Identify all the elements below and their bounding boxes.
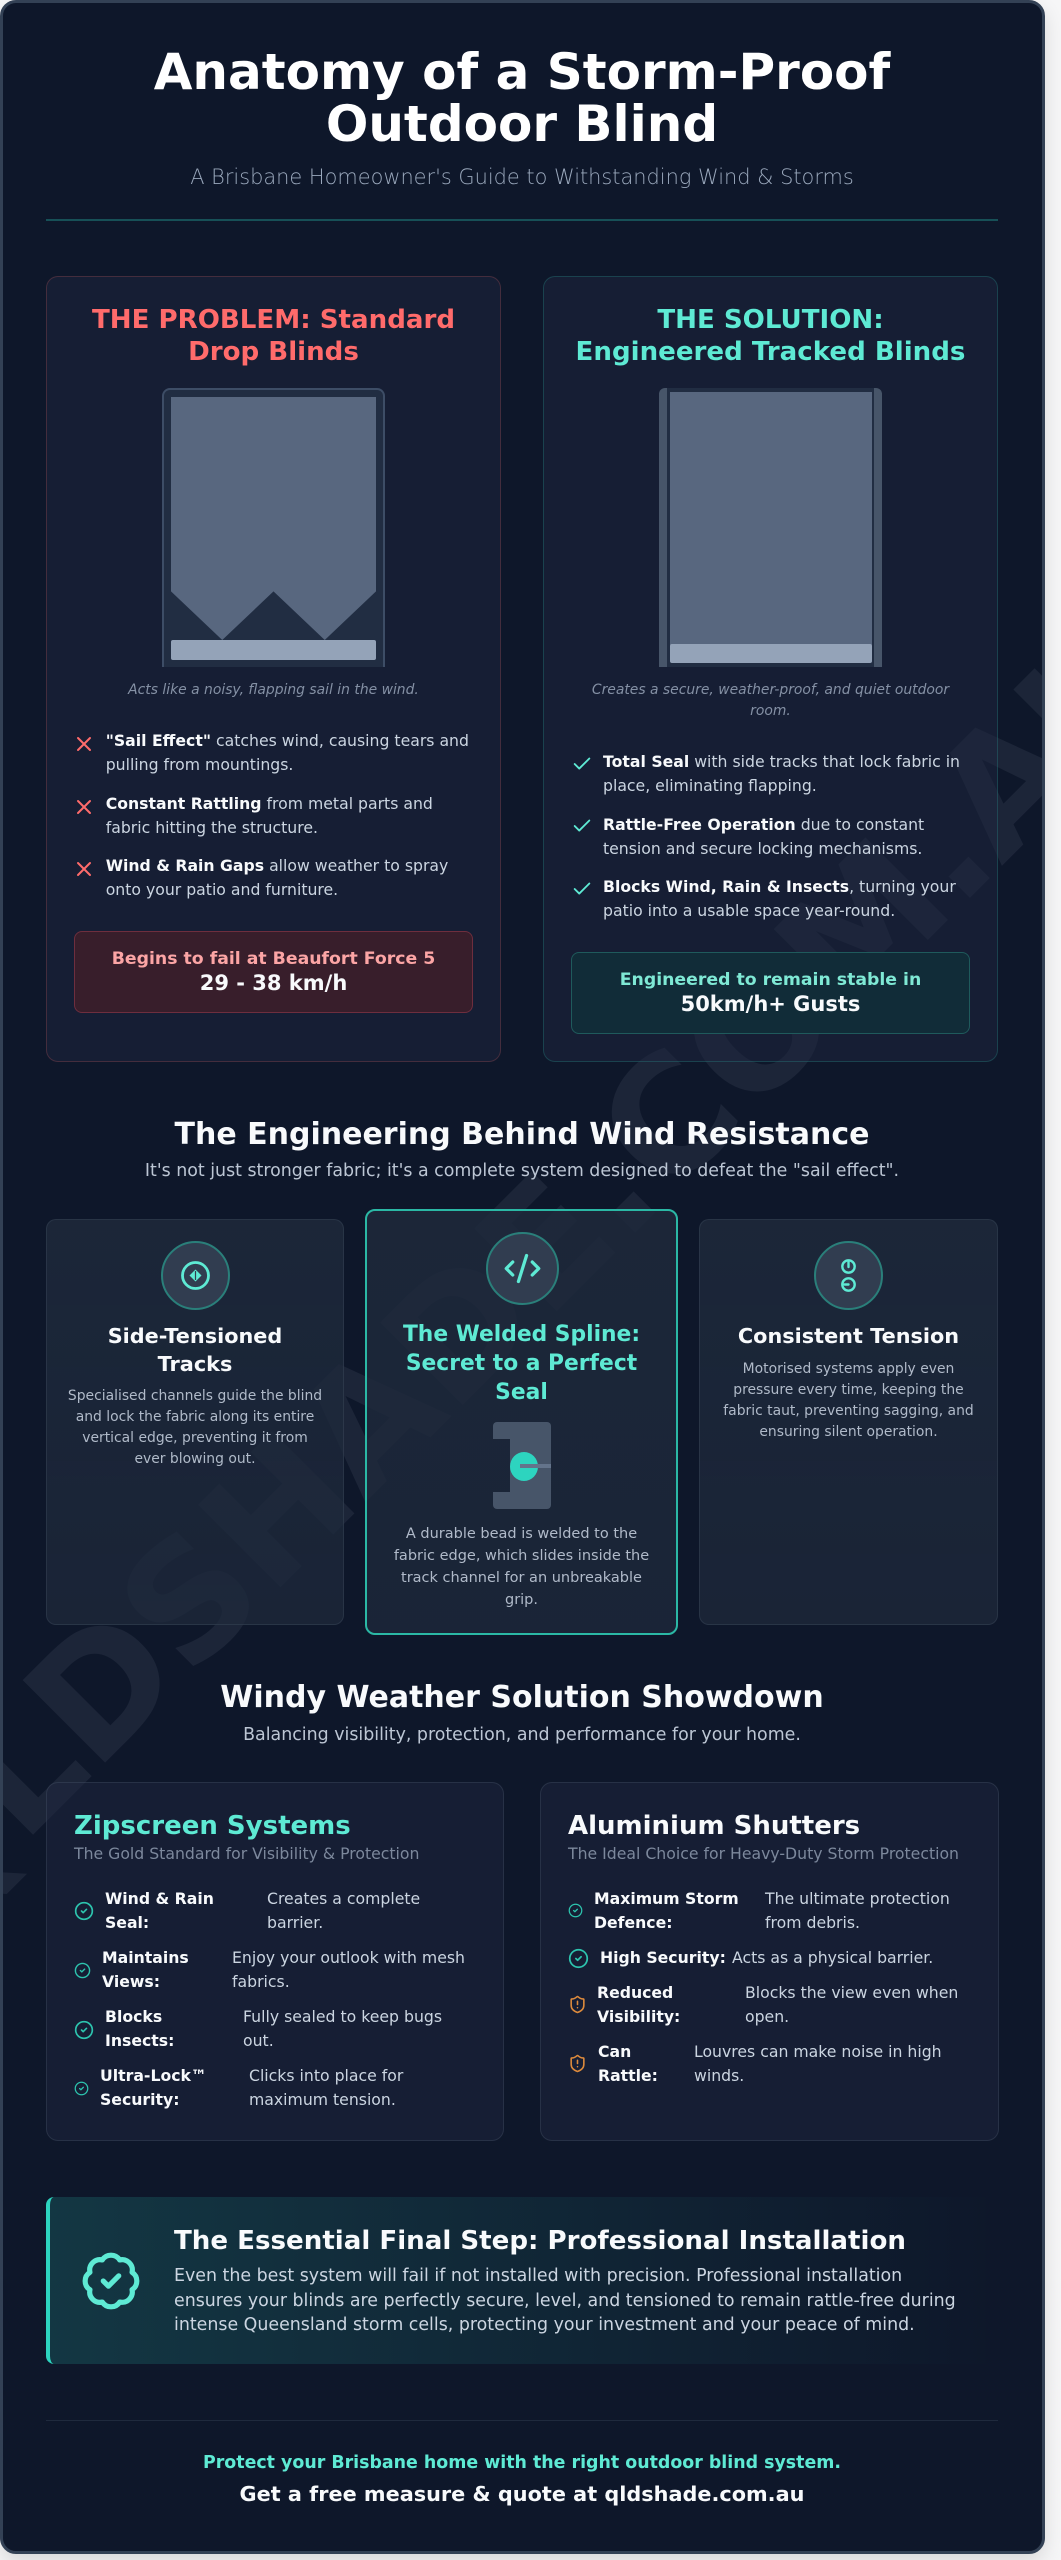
sealed fabric — [670, 392, 872, 645]
problem point three — [106, 856, 448, 899]
cross icon — [77, 862, 91, 876]
featured description: A durable bead is welded to the — [406, 1526, 637, 1542]
solution point one: place, eliminating flapping. — [603, 776, 817, 795]
card description: vertical edge, preventing it from — [82, 1430, 308, 1446]
solution point two: tension and secure locking mechanisms. — [603, 839, 922, 858]
illustration: tracked blind — [659, 388, 882, 667]
callout body — [174, 2264, 956, 2338]
feature: blocks insects: Blocks — [105, 2007, 162, 2026]
stability stat box — [571, 952, 970, 1034]
illustration: spline in track — [493, 1422, 551, 1509]
feature detail: Enjoy your outlook with mesh — [232, 1948, 465, 1967]
title: Outdoor Blind — [326, 94, 718, 152]
icon: warning shield — [568, 2054, 587, 2073]
shutters subheading: The Ideal Choice for Heavy-Duty Storm Protection — [568, 1844, 959, 1863]
featured description: track channel for an unbreakable — [401, 1570, 642, 1586]
card description: Specialised channels guide the blind — [68, 1388, 322, 1404]
solution point one — [603, 752, 960, 795]
feature detail: Acts as a physical barrier. — [732, 1948, 933, 1967]
card description: and lock the fabric along its entire — [76, 1409, 314, 1425]
footer call to action: Get a free measure & quote at qldshade.com.au — [240, 2482, 804, 2506]
left track — [659, 388, 667, 667]
icon: check circle — [74, 2020, 94, 2040]
card description — [68, 1388, 322, 1467]
panel: the problem — [46, 276, 501, 1062]
icon: warning shield — [568, 1995, 587, 2014]
feature: wind and rain seal: Seal: — [105, 1913, 149, 1932]
solution point one: Total Seal with side tracks that lock fabric in — [603, 752, 960, 771]
flapping fabric — [171, 397, 376, 640]
feature detail: winds. — [694, 2066, 744, 2085]
card description: Motorised systems apply even — [743, 1361, 954, 1377]
feature detail: The ultimate protection — [765, 1889, 950, 1908]
icon: check circle — [74, 1962, 90, 1978]
feature detail: open. — [745, 2007, 789, 2026]
solution point three: patio into a usable space year-round. — [603, 901, 895, 920]
feature detail — [745, 1981, 958, 2030]
footer — [46, 2448, 998, 2510]
panel: zipscreen systems — [46, 1782, 504, 2141]
feature detail — [232, 1948, 465, 1991]
problem heading: THE PROBLEM: Standard — [92, 305, 455, 335]
feature detail: Fully sealed to keep bugs — [243, 2007, 442, 2026]
problem point two: fabric hitting the structure. — [106, 818, 318, 837]
zipscreen heading: Zipscreen Systems — [74, 1811, 351, 1841]
feature detail: maximum tension. — [249, 2090, 396, 2109]
card heading: Consistent Tension — [738, 1324, 959, 1348]
feature detail — [249, 2066, 404, 2109]
problem heading — [92, 305, 455, 366]
problem point one — [106, 731, 469, 774]
feature: wind and rain seal: Wind & Rain — [105, 1889, 214, 1908]
solution list — [574, 752, 960, 920]
card description: fabric taut, preventing sagging, and — [723, 1403, 974, 1419]
feature: ultra-lock security: Ultra-Lock™ — [100, 2066, 207, 2085]
feature: can rattle: Rattle: — [598, 2066, 658, 2085]
stability label: Engineered to remain stable in — [620, 970, 921, 990]
hem bar — [171, 640, 376, 660]
feature: can rattle: Can — [598, 2042, 631, 2061]
callout: professional installation — [46, 2197, 998, 2364]
feature: ultra-lock security: Security: — [100, 2090, 180, 2109]
card: welded spline (featured) — [365, 1209, 678, 1635]
check icon — [574, 820, 590, 832]
footer tagline: Protect your Brisbane home with the right outdoor blind system. — [203, 2453, 841, 2473]
problem point two — [106, 794, 433, 837]
feature detail: from debris. — [765, 1913, 860, 1932]
featured heading: Seal — [495, 1380, 548, 1405]
feature: maximum storm defence: Maximum Storm — [594, 1889, 739, 1908]
feature: maintains views: Views: — [102, 1972, 160, 1991]
icon: check circle — [74, 1902, 94, 1920]
feature: reduced visibility: Reduced — [597, 1983, 673, 2002]
feature: maintains views: Maintains — [102, 1948, 189, 1967]
feature: wind and rain seal — [105, 1889, 214, 1932]
feature: maintains views — [102, 1948, 189, 1991]
card description: pressure every time, keeping the — [733, 1382, 964, 1398]
feature detail — [267, 1889, 420, 1932]
header — [154, 42, 891, 189]
card: consistent tension — [699, 1219, 998, 1625]
solution point three: Blocks Wind, Rain & Insects, turning your — [603, 877, 956, 896]
featured description — [394, 1526, 649, 1608]
feature detail: fabrics. — [232, 1972, 290, 1991]
stability value: 50km/h+ Gusts — [681, 992, 860, 1016]
failure stat box — [74, 931, 473, 1013]
solution caption — [592, 682, 950, 719]
solution heading — [576, 305, 965, 366]
check icon — [574, 758, 590, 770]
zipscreen subheading: The Gold Standard for Visibility & Protection — [74, 1844, 419, 1863]
heading: engineering section: The Engineering Behind Wind Resistance — [175, 1117, 869, 1152]
feature detail: Blocks the view even when — [745, 1983, 958, 2002]
feature detail: Creates a complete — [267, 1889, 420, 1908]
cross icon — [77, 800, 91, 814]
callout body: ensures your blinds are perfectly secure, level, and tensioned to remain rattle-free during — [174, 2290, 956, 2310]
feature detail: out. — [243, 2031, 274, 2050]
failure label: Begins to fail at Beaufort Force 5 — [112, 949, 435, 969]
hem bar — [670, 644, 872, 663]
feature: maximum storm defence — [594, 1889, 739, 1932]
feature: maximum storm defence: Defence: — [594, 1913, 673, 1932]
engineering subheading: It's not just stronger fabric; it's a complete system designed to defeat the "sail effect". — [145, 1161, 899, 1181]
icon: motor tension — [814, 1241, 883, 1310]
featured description: fabric edge, which slides inside the — [394, 1548, 649, 1564]
solution caption: Creates a secure, weather-proof, and quiet outdoor — [592, 682, 949, 698]
subtitle: A Brisbane Homeowner's Guide to Withstanding Wind & Storms — [190, 165, 854, 189]
failure value: 29 - 38 km/h — [200, 971, 347, 995]
showdown subheading: Balancing visibility, protection, and performance for your home. — [243, 1725, 801, 1745]
icon: code brackets — [486, 1232, 559, 1305]
problem point one: "Sail Effect" catches wind, causing tears and — [106, 731, 469, 750]
solution point two — [603, 815, 924, 858]
problem point three: Wind & Rain Gaps allow weather to spray — [106, 856, 448, 875]
featured heading: Secret to a Perfect — [406, 1351, 637, 1376]
card description: ensuring silent operation. — [759, 1424, 938, 1440]
feature: can rattle — [598, 2040, 658, 2089]
feature: high security: High Security: — [600, 1948, 726, 1967]
problem point one: pulling from mountings. — [106, 755, 293, 774]
card heading: Tracks — [158, 1352, 232, 1376]
cross icon — [77, 737, 91, 751]
problem heading: Drop Blinds — [188, 336, 359, 366]
check icon — [574, 882, 590, 894]
feature detail — [764, 1889, 950, 1932]
icon: side track — [161, 1241, 230, 1310]
icon: check circle — [568, 1904, 582, 1918]
card description: ever blowing out. — [134, 1451, 256, 1467]
callout body: Even the best system will fail if not installed with precision. Professional installation — [174, 2266, 902, 2286]
featured heading: The Welded Spline: — [403, 1322, 640, 1347]
problem caption: Acts like a noisy, flapping sail in the wind. — [128, 682, 419, 698]
icon: check circle — [568, 1948, 588, 1968]
card description — [723, 1361, 974, 1440]
card heading — [108, 1324, 282, 1376]
panel: the solution — [543, 276, 998, 1062]
fabric edge — [520, 1464, 551, 1468]
title: Anatomy of a Storm-Proof — [154, 42, 890, 100]
feature detail — [243, 2007, 442, 2050]
panel: aluminium shutters — [540, 1782, 999, 2141]
icon: verified badge — [80, 2250, 142, 2312]
solution heading: THE SOLUTION: — [657, 305, 884, 335]
feature detail: Louvres can make noise in high — [694, 2042, 942, 2061]
welded bead — [510, 1452, 538, 1481]
problem point three: onto your patio and furniture. — [106, 880, 338, 899]
card: side-tensioned tracks — [46, 1219, 344, 1625]
illustration: drop blind — [162, 388, 385, 667]
heading: showdown section: Windy Weather Solution Showdown — [220, 1680, 824, 1715]
callout heading: The Essential Final Step: Professional Installation — [174, 2226, 906, 2256]
feature: ultra-lock security — [100, 2066, 207, 2109]
icon: check circle — [74, 2082, 88, 2096]
featured description: grip. — [505, 1592, 538, 1608]
solution caption: room. — [750, 703, 791, 719]
feature: reduced visibility — [597, 1981, 680, 2030]
right track — [874, 388, 882, 667]
callout body: intense Queensland storm cells, protecting your investment and your peace of mind. — [174, 2315, 915, 2335]
solution heading: Engineered Tracked Blinds — [576, 336, 965, 366]
card heading: Side-Tensioned — [108, 1324, 282, 1348]
solution point three — [603, 877, 956, 920]
problem list — [77, 731, 469, 899]
shutters heading: Aluminium Shutters — [568, 1811, 860, 1841]
feature detail: barrier. — [267, 1913, 323, 1932]
feature: blocks insects: Insects: — [105, 2031, 174, 2050]
feature: blocks insects — [105, 2007, 174, 2050]
featured heading — [403, 1322, 640, 1405]
track channel — [493, 1422, 551, 1509]
feature detail — [694, 2040, 942, 2089]
feature detail: Clicks into place for — [249, 2066, 403, 2085]
problem point two: Constant Rattling from metal parts and — [106, 794, 433, 813]
solution point two: Rattle-Free Operation due to constant — [603, 815, 924, 834]
title — [154, 42, 891, 152]
feature: reduced visibility: Visibility: — [597, 2007, 680, 2026]
